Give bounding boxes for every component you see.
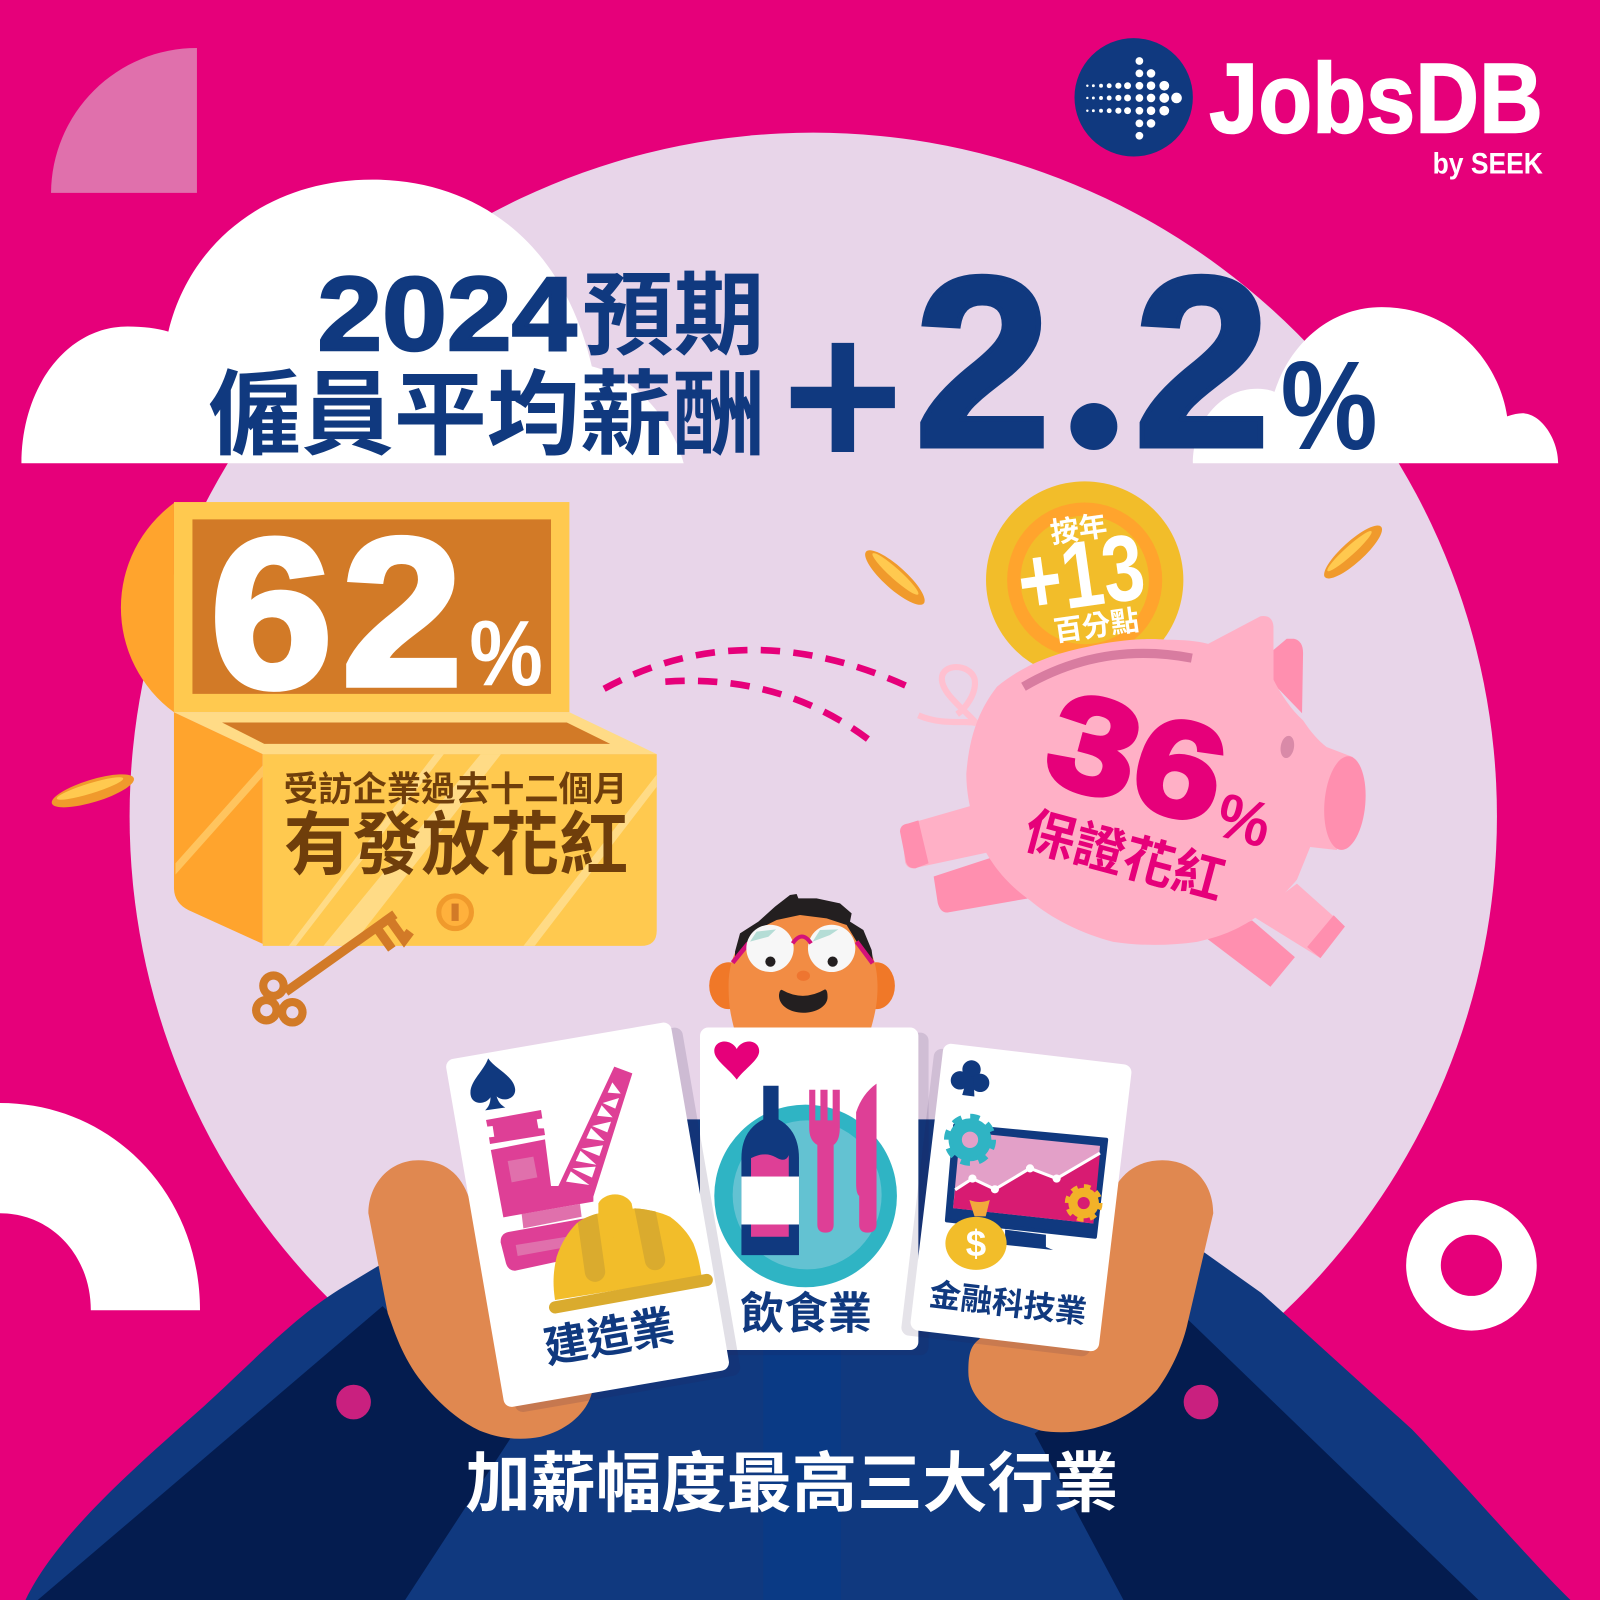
- 36% figure: %: [1209, 780, 1278, 862]
- jacket lapel right: [1035, 1319, 1479, 1600]
- gear: yellow: [1068, 1188, 1099, 1218]
- suit icon: heart: [714, 1042, 759, 1080]
- card: food and beverage: [700, 1028, 929, 1355]
- suit icon: club: [949, 1058, 992, 1098]
- title line 1: 預期: [583, 243, 764, 374]
- key: [252, 914, 410, 1027]
- headline figure +2.2%: 2: [914, 227, 1051, 498]
- title line 1: 2024: [317, 256, 577, 373]
- money bag: [945, 1200, 1007, 1270]
- glasses: [733, 925, 873, 972]
- 62% figure: 2: [342, 495, 462, 730]
- pig body: [966, 616, 1363, 945]
- coin: left: [49, 768, 137, 814]
- logo tagline: by SEEK: [1433, 147, 1543, 180]
- decorative white ring: [1423, 1217, 1519, 1313]
- headline figure +2.2%: %: [1281, 334, 1378, 476]
- pig coin slot: [1023, 653, 1192, 687]
- guaranteed bonus label: 保證花紅: [1017, 789, 1234, 914]
- chest lid back: [121, 503, 174, 712]
- chest lock: [439, 896, 471, 929]
- pig back legs: [934, 857, 1031, 913]
- crane cab: [486, 1067, 632, 1217]
- fork: [809, 1090, 840, 1233]
- mouth: [779, 989, 828, 1013]
- pig snout: [1320, 755, 1369, 852]
- hair: [735, 894, 873, 963]
- ears: [709, 962, 895, 1009]
- chart line: [955, 1153, 1100, 1193]
- chest front: [263, 754, 657, 946]
- title line 1: [317, 243, 764, 374]
- title block: [208, 227, 1378, 498]
- pig tail: [918, 667, 977, 723]
- jacket button left: [336, 1385, 371, 1419]
- pig eye: [1279, 735, 1296, 759]
- gear: teal: [949, 1118, 991, 1161]
- left cloud: [21, 180, 684, 463]
- treasure chest: 62%: [121, 495, 657, 946]
- bottom heading: 加薪幅度最高三大行業: [465, 1430, 1118, 1525]
- card label: 飲食業: [740, 1278, 872, 1342]
- 62% figure: %: [469, 602, 543, 706]
- decorative quarter circle: [51, 48, 197, 193]
- 36% figure: 36: [1033, 662, 1241, 853]
- card: construction: [445, 1021, 741, 1413]
- coin: +13 badge: [986, 481, 1183, 679]
- chest caption large: 有發放花紅: [284, 788, 628, 888]
- 36% figure: [1033, 662, 1298, 868]
- character jacket: [26, 1119, 1570, 1600]
- knife: [856, 1084, 877, 1233]
- chest rim and opening: [174, 712, 657, 754]
- jacket button right: [1184, 1385, 1218, 1419]
- crane track: [501, 1217, 590, 1271]
- wine bottle: [741, 1086, 799, 1255]
- crane: [486, 1067, 632, 1271]
- hard hat: [554, 1194, 707, 1307]
- right hand: [968, 1160, 1213, 1432]
- left hand: [368, 1160, 612, 1439]
- monitor: [947, 1126, 1106, 1250]
- 62% figure: [210, 495, 543, 732]
- card: fintech: [901, 1043, 1132, 1357]
- pig ear back: [1273, 639, 1303, 713]
- jacket lapel left: [38, 1306, 510, 1600]
- crane lattice: [566, 1082, 621, 1185]
- logo icon: dotted arrow: [1074, 38, 1193, 157]
- chest lid: [174, 502, 569, 712]
- character head: [709, 894, 895, 1031]
- logo: JobsDB by SEEK: [1074, 38, 1543, 180]
- 62% figure: 6: [210, 495, 333, 732]
- plate: [714, 1105, 897, 1287]
- money bag: $: [966, 1223, 986, 1264]
- right cloud: [1193, 307, 1558, 463]
- face: [729, 914, 878, 1031]
- headline figure +2.2%: 2: [1134, 227, 1270, 498]
- chest side: [174, 712, 263, 944]
- chest caption small: 受訪企業過去十二個月: [284, 761, 627, 811]
- card label: 金融科技業: [927, 1269, 1089, 1333]
- year on year label: 按年: [1047, 503, 1110, 552]
- coin: right: [1318, 519, 1388, 585]
- coin: middle: [859, 543, 931, 612]
- pig front legs: [901, 805, 990, 868]
- card label: 建造業: [538, 1290, 679, 1376]
- logo wordmark: JobsDB: [1209, 43, 1543, 154]
- decorative white arch: [0, 1103, 200, 1310]
- title line 2: 僱員平均薪酬: [208, 339, 765, 474]
- piggy bank: [900, 616, 1369, 987]
- +13 figure: +13: [1011, 513, 1151, 635]
- nose: [797, 971, 810, 981]
- percentage points label: 百分點: [1051, 598, 1141, 650]
- suit icon: spade: [466, 1055, 517, 1112]
- headline figure +2.2%: [791, 227, 1378, 498]
- dashed coin trajectory: [604, 650, 908, 745]
- +13 badge text: [1009, 499, 1154, 654]
